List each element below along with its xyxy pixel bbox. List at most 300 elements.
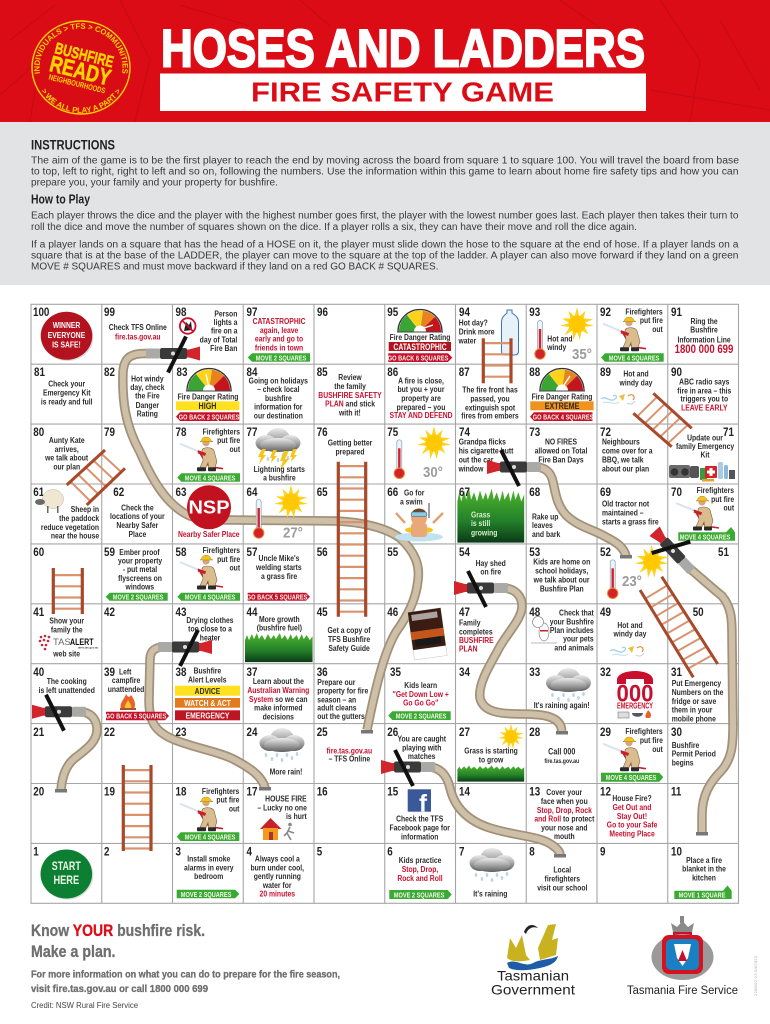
square 67: growing bbox=[471, 528, 498, 538]
square 13: 13 bbox=[529, 786, 540, 799]
square 66: Go for bbox=[404, 488, 424, 498]
square 82: the Fire bbox=[135, 391, 160, 401]
square 3: 3 bbox=[176, 846, 181, 859]
square 10: kitchen bbox=[692, 873, 716, 883]
badge: bushfire ready neighbourhoods bbox=[31, 20, 131, 115]
square 3: Install smoke bbox=[187, 854, 231, 864]
square 48: your Bushfire bbox=[550, 617, 594, 627]
square 73: Fire Ban Days bbox=[538, 455, 584, 465]
square 29 bbox=[600, 726, 663, 782]
square 91: Bushfire bbox=[690, 325, 718, 335]
square 1: 1 bbox=[33, 846, 39, 859]
move 2 squares: MOVE 2 SQUARES bbox=[181, 891, 232, 899]
square 85: Review bbox=[338, 372, 362, 382]
logo: tasmanian government: Government bbox=[491, 982, 575, 998]
square 30 bbox=[671, 726, 716, 768]
square 30: Bushfire bbox=[672, 740, 700, 750]
square 36: property for fire bbox=[317, 686, 369, 696]
square 18: put fire bbox=[216, 795, 240, 805]
square 84 bbox=[247, 366, 308, 421]
square 69: maintained – bbox=[602, 508, 644, 518]
square 68: Rake up bbox=[532, 512, 559, 522]
square 85: with it! bbox=[338, 408, 361, 418]
square 54: Hay shed bbox=[476, 558, 506, 568]
square 46 bbox=[387, 606, 447, 660]
square 49: 49 bbox=[600, 606, 611, 619]
square 97: again, leave bbox=[260, 325, 299, 335]
square 53: Kids are home on bbox=[533, 557, 590, 567]
square 98: Fire Ban bbox=[210, 343, 238, 353]
icon: emergency 000: 000 bbox=[616, 680, 654, 708]
hoses bbox=[55, 353, 733, 858]
text block: how to play: Each player throws the dice and the player with the highest number goes first, the player with the lowest number goes last. Each player then takes their turn to bbox=[31, 210, 739, 222]
alert: watch and act: WATCH & ACT bbox=[184, 698, 231, 708]
square 12: Get Out and bbox=[613, 802, 652, 812]
square 98: day of Total bbox=[200, 335, 237, 345]
start badge bbox=[41, 850, 93, 900]
logo: tas alert: TAS bbox=[53, 637, 71, 648]
icon: rain cloud bbox=[470, 848, 514, 882]
square 62: locations of your bbox=[110, 511, 165, 521]
icon: firefighter bbox=[180, 797, 223, 831]
square 82: Rating bbox=[137, 409, 158, 419]
text block: how to play: square that is at the base of the LADDER, the player can move to the square at the top of the ladder. A player can also move forward if they land on a green bbox=[31, 250, 738, 262]
winner badge bbox=[41, 312, 93, 361]
square 90: LEAVE EARLY bbox=[681, 403, 728, 413]
square 49 bbox=[600, 606, 647, 656]
square 89: windy day bbox=[619, 378, 653, 388]
logo: tasmanian government bbox=[491, 924, 575, 998]
square 15: information bbox=[401, 832, 439, 842]
text block: how to play: MOVE # SQUARES and must move backward if they land on a red GO BACK # SQUARES. bbox=[31, 262, 438, 272]
square 43: too close to a bbox=[188, 624, 233, 634]
square 59: flyscreens on bbox=[118, 573, 162, 583]
icon: no fire bbox=[180, 318, 196, 334]
square 25: – TFS Online bbox=[329, 754, 371, 764]
icon: fire danger gauge bbox=[397, 310, 443, 338]
square 59: windows bbox=[125, 582, 154, 592]
square 44: (bushfire fuel) bbox=[257, 623, 302, 633]
square 77: a bushfire bbox=[263, 473, 296, 483]
square 94: Hot day? bbox=[459, 318, 488, 328]
square 51: 51 bbox=[718, 546, 729, 559]
square 44: More growth bbox=[259, 614, 300, 624]
icon: firefighter bbox=[676, 496, 719, 530]
square 25 bbox=[317, 726, 372, 764]
square 72 bbox=[600, 426, 653, 474]
square 30: 30 bbox=[671, 726, 682, 739]
square 80: we talk about bbox=[44, 453, 89, 463]
square 36: Prepare our bbox=[317, 677, 355, 687]
square 30: begins bbox=[672, 758, 694, 768]
square 61: Sheep in bbox=[71, 504, 99, 514]
square 92: out bbox=[652, 324, 663, 334]
square 87: extinguish spot bbox=[465, 403, 516, 413]
text block: aim of the game: to top, left to right, right to left and so on, following the numbers. Use the information within this game to learn about home fire safety tips and how you can bbox=[31, 166, 738, 178]
square 43: Drying clothes bbox=[186, 615, 234, 625]
icon: sun bbox=[274, 485, 308, 518]
square 84: bushfire bbox=[265, 393, 292, 403]
image: grass bbox=[457, 766, 524, 782]
square 52 bbox=[600, 545, 669, 598]
rating: high: HIGH bbox=[199, 401, 217, 411]
square 71: Update our bbox=[687, 433, 723, 443]
square 86: property are bbox=[401, 393, 442, 403]
square 5: 5 bbox=[317, 846, 322, 859]
icon: sun bbox=[560, 307, 594, 340]
square 25: fire.tas.gov.au bbox=[327, 746, 372, 756]
square 8 bbox=[529, 846, 587, 893]
square 12 bbox=[600, 786, 658, 839]
square 78 bbox=[176, 426, 241, 483]
square 89: 89 bbox=[600, 366, 611, 379]
square 66 bbox=[387, 486, 443, 542]
square 78: put fire bbox=[217, 435, 241, 445]
badge: bushfire ready neighbourhoods: INDIVIDUALS > TFS > COMMUNITIES bbox=[34, 23, 128, 74]
square 96: 96 bbox=[317, 306, 328, 319]
square 42: 42 bbox=[104, 606, 115, 619]
square 93: Hot and bbox=[547, 334, 573, 344]
square 28 bbox=[529, 726, 580, 765]
icon: firefighter bbox=[180, 555, 223, 590]
square 83 bbox=[176, 366, 240, 422]
footer message: Make a plan. bbox=[31, 943, 116, 961]
square 60: 60 bbox=[33, 546, 44, 559]
square 77 bbox=[247, 426, 305, 483]
square 86: prepared – you bbox=[397, 402, 446, 412]
footer message: visit fire.tas.gov.au or call 1800 000 699 bbox=[31, 984, 208, 995]
square 4 bbox=[247, 846, 304, 899]
square 47: PLAN bbox=[459, 644, 478, 654]
icon: sun bbox=[417, 426, 451, 459]
square 4: water for bbox=[262, 880, 292, 890]
square 33: 33 bbox=[529, 666, 540, 679]
hose nozzle: square 70 bbox=[642, 518, 705, 582]
logo: tas alert: alert.tas.gov.au bbox=[78, 646, 99, 650]
icon: emergency kit bbox=[669, 462, 735, 482]
square 28: 28 bbox=[529, 726, 540, 739]
move 4 squares: MOVE 4 SQUARES bbox=[606, 774, 657, 782]
hose nozzle: square 40 bbox=[32, 695, 86, 731]
square 39: campfire bbox=[112, 675, 141, 685]
square 85: the family bbox=[334, 381, 367, 391]
square 86: but you + your bbox=[398, 384, 444, 394]
footer message: For more information on what you can do to prepare for the fire season, bbox=[31, 970, 340, 981]
square 68: and bark bbox=[532, 529, 561, 539]
square 26: 26 bbox=[387, 726, 398, 739]
square 40: 40 bbox=[33, 666, 44, 679]
subtitle box: FIRE SAFETY GAME bbox=[251, 77, 554, 108]
square 36 bbox=[317, 666, 369, 721]
square 12: Stay Out! bbox=[617, 811, 647, 821]
icon: water bottle bbox=[502, 310, 518, 355]
icon: wind bbox=[601, 394, 635, 404]
square 36: season – an bbox=[317, 695, 356, 705]
square 87: 87 bbox=[459, 366, 470, 379]
square 58 bbox=[176, 545, 241, 602]
square 18: 18 bbox=[176, 786, 186, 799]
square 8: firefighters bbox=[545, 874, 580, 884]
square 3 bbox=[176, 846, 239, 899]
square 56: 56 bbox=[317, 546, 328, 559]
square 8: 8 bbox=[529, 846, 535, 859]
square 33: It's raining again! bbox=[534, 700, 590, 710]
square 87: The fire front has bbox=[462, 385, 518, 395]
move 4 squares: MOVE 4 SQUARES bbox=[609, 355, 660, 363]
go back 5 squares: GO BACK 5 SQUARES bbox=[106, 713, 167, 721]
ladder: square 31 to 52 bbox=[640, 577, 718, 677]
icon: emergency 000: EMERGENCY bbox=[617, 700, 653, 710]
square 99: fire.tas.gov.au bbox=[115, 332, 161, 342]
square 86 bbox=[387, 366, 453, 420]
square 41: Show your bbox=[49, 616, 84, 626]
icon: firefighter bbox=[603, 317, 646, 351]
square 58: 58 bbox=[176, 546, 186, 559]
square 90 bbox=[671, 366, 731, 413]
credit: Credit: NSW Rural Fire Service bbox=[31, 1001, 139, 1010]
square 41 bbox=[33, 606, 99, 659]
heading: instructions: INSTRUCTIONS bbox=[31, 138, 115, 152]
square 93: 35° bbox=[572, 345, 592, 362]
square 67: Grass bbox=[471, 510, 490, 520]
square 61: 61 bbox=[33, 486, 44, 499]
move 4 squares: MOVE 4 SQUARES bbox=[185, 834, 236, 842]
NSP badge: NSP bbox=[188, 498, 230, 518]
square 26 bbox=[387, 726, 446, 761]
square 13: Cover your bbox=[546, 787, 582, 797]
alert: advice: ADVICE bbox=[195, 686, 220, 696]
square 71: Kit bbox=[701, 450, 710, 460]
square 92: 92 bbox=[600, 306, 611, 319]
square 75: 30° bbox=[423, 463, 443, 480]
square 64: 27° bbox=[283, 524, 303, 541]
square 1 bbox=[33, 846, 93, 900]
square 37: make informed bbox=[254, 703, 303, 713]
text block: how to play: roll the dice and move the number of squares shown on the dice. If a player rolls a six, they can have their move and roll the dice again. bbox=[31, 222, 637, 233]
square 80: our plan bbox=[53, 462, 80, 472]
square 3: bedroom bbox=[194, 871, 223, 881]
icon: rain cloud bbox=[260, 728, 304, 762]
icon: thermometer bbox=[535, 320, 545, 359]
square 18: Firefighters bbox=[202, 786, 239, 796]
square 17: is hurt bbox=[286, 811, 307, 821]
text block: aim of the game bbox=[31, 156, 739, 188]
header banner bbox=[0, 0, 770, 122]
square 53: we talk about our bbox=[533, 575, 590, 585]
square 36: out the gutters bbox=[317, 711, 365, 721]
square 39: unattended bbox=[108, 684, 145, 694]
square 49: windy day bbox=[613, 629, 647, 639]
square 59: your property bbox=[118, 556, 163, 566]
square 71: family Emergency bbox=[676, 441, 735, 451]
square 64 bbox=[247, 485, 308, 541]
square 4: burn under cool, bbox=[251, 863, 304, 873]
square 37: 37 bbox=[247, 666, 257, 679]
square 47: BUSHFIRE bbox=[459, 635, 494, 645]
square 97: early and go to bbox=[255, 334, 303, 344]
square 66: 66 bbox=[387, 486, 398, 499]
square 47: completes bbox=[459, 627, 493, 637]
square 64: 64 bbox=[247, 486, 258, 499]
square 65: 65 bbox=[317, 486, 328, 499]
square 71: 71 bbox=[723, 426, 734, 439]
square 29: 29 bbox=[600, 726, 611, 739]
square 90: 90 bbox=[671, 366, 682, 379]
square 58: out bbox=[230, 563, 240, 573]
square 74: Grandpa flicks bbox=[459, 437, 506, 447]
square 70: 70 bbox=[671, 486, 682, 499]
square 44 bbox=[245, 606, 313, 662]
square 69: starts a grass fire bbox=[602, 517, 659, 527]
square 19: 19 bbox=[104, 786, 115, 799]
badge: bushfire ready neighbourhoods: READY bbox=[47, 50, 114, 91]
logo: tas alert bbox=[39, 635, 99, 650]
square 26: playing with bbox=[402, 743, 442, 753]
square 10 bbox=[671, 846, 732, 900]
move 4 squares: MOVE 4 SQUARES bbox=[680, 534, 731, 542]
square 6: Rock and Roll bbox=[397, 873, 443, 883]
square 9: 9 bbox=[600, 846, 605, 859]
square 76 bbox=[317, 426, 372, 457]
square 78: out bbox=[230, 444, 240, 454]
square 48: 48 bbox=[529, 606, 540, 619]
footer message: Know YOUR bushfire risk. bbox=[31, 922, 205, 940]
square 76: Getting better bbox=[328, 438, 372, 448]
square 80 bbox=[33, 426, 89, 472]
icon: fire danger gauge bbox=[186, 368, 232, 396]
square 54: on fire bbox=[480, 567, 502, 577]
go back 6 squares: GO BACK 6 SQUARES bbox=[388, 355, 449, 363]
square 39: Left bbox=[119, 667, 132, 677]
square 66: a swim bbox=[400, 497, 423, 507]
square 31: fridge or save bbox=[672, 696, 717, 706]
ladder: square 2 to 19 bbox=[123, 765, 151, 851]
icon: facebook: f bbox=[419, 790, 428, 818]
square 4: 20 minutes bbox=[260, 889, 295, 899]
square 57: a grass fire bbox=[261, 571, 298, 581]
square 75 bbox=[387, 426, 451, 480]
square 48 bbox=[529, 606, 594, 653]
ladder: square 41 to 60 bbox=[53, 568, 82, 614]
logo: tasmanian government: Tasmanian bbox=[497, 968, 569, 984]
square 62: Nearby Safer bbox=[116, 520, 158, 530]
square 91: 1800 000 699 bbox=[675, 343, 733, 356]
print code: 2208/02 V3 04/2023 bbox=[753, 955, 758, 996]
square 13: Stop, Drop, Rock bbox=[537, 805, 593, 815]
square 89: Hot and bbox=[623, 369, 649, 379]
square 73: allowed on Total bbox=[535, 446, 587, 456]
square 49: Hot and bbox=[617, 620, 643, 630]
square 47: 47 bbox=[459, 606, 470, 619]
square 59: 59 bbox=[104, 546, 115, 559]
square 93: 93 bbox=[529, 306, 540, 319]
square 87: fires from embers bbox=[461, 411, 519, 421]
square 62: 62 bbox=[113, 486, 124, 499]
go back 2 squares: GO BACK 2 SQUARES bbox=[179, 414, 240, 422]
square 18 bbox=[176, 786, 240, 842]
square 86: 86 bbox=[387, 366, 398, 379]
square 13 bbox=[529, 786, 595, 841]
square 7 bbox=[459, 846, 514, 899]
square 10: Place a fire bbox=[686, 855, 723, 865]
square 100: 100 bbox=[33, 306, 49, 319]
square 47 bbox=[459, 606, 494, 654]
square 61: near the house bbox=[51, 531, 100, 541]
square 8: Local bbox=[553, 865, 571, 875]
icon: fire danger gauge bbox=[539, 368, 585, 396]
square 24: 24 bbox=[247, 726, 258, 739]
start badge: START bbox=[52, 861, 81, 873]
square 12: Meeting Place bbox=[609, 829, 655, 839]
square 97 bbox=[247, 306, 310, 363]
square 27: Grass is starting bbox=[464, 746, 518, 756]
badge: bushfire ready neighbourhoods: BUSHFIRE bbox=[53, 40, 115, 71]
image: bushfire safety guide book bbox=[408, 608, 447, 660]
square 24: More rain! bbox=[270, 767, 302, 777]
image: grass bbox=[245, 633, 313, 662]
square 62: Place bbox=[129, 529, 147, 539]
square 17: HOUSE FIRE bbox=[265, 794, 307, 804]
square 54: 54 bbox=[459, 546, 471, 559]
square 43 bbox=[176, 606, 234, 643]
footer message bbox=[31, 922, 340, 995]
square 84: 84 bbox=[247, 366, 258, 379]
square 31: 31 bbox=[671, 666, 682, 679]
square 94: Drink more bbox=[459, 327, 495, 337]
square 99: Check TFS Online bbox=[109, 322, 167, 332]
rating: extreme: EXTREME bbox=[545, 401, 580, 411]
winner badge: IS SAFE! bbox=[52, 340, 81, 350]
square 91: Ring the bbox=[690, 316, 718, 326]
square 82: day, check bbox=[130, 382, 165, 392]
square 39 bbox=[104, 666, 169, 721]
square 74 bbox=[458, 426, 514, 474]
square 40: is left unattended bbox=[39, 685, 95, 695]
ladder: square 71 to 89 bbox=[633, 393, 692, 447]
square 57 bbox=[247, 546, 310, 602]
square 18: out bbox=[229, 804, 240, 814]
square 41: 41 bbox=[33, 606, 44, 619]
icon: sheep bbox=[35, 490, 64, 513]
icon: wind bbox=[610, 646, 644, 656]
icon: sun bbox=[498, 724, 524, 749]
square 35: 35 bbox=[390, 666, 401, 679]
square 27 bbox=[457, 724, 524, 782]
square 52: 52 bbox=[600, 546, 611, 559]
square 80: arrives, bbox=[55, 444, 79, 454]
square 73 bbox=[529, 426, 587, 465]
square 99: 99 bbox=[104, 306, 115, 319]
square 72: Neighbours bbox=[602, 437, 640, 447]
winner badge: WINNER bbox=[53, 320, 81, 330]
icon: thermometer bbox=[608, 560, 618, 598]
square 12: House Fire? bbox=[612, 793, 652, 803]
icon: emergency 000 bbox=[616, 671, 654, 718]
square 17: – Lucky no one bbox=[257, 803, 307, 813]
square 35: "Get Down Low + bbox=[393, 689, 449, 699]
square 76: prepared bbox=[335, 447, 365, 457]
icon: sun bbox=[635, 545, 669, 578]
square 8: visit our school bbox=[537, 883, 587, 893]
square 81: Check your bbox=[48, 379, 85, 389]
square 97: 97 bbox=[247, 306, 257, 319]
square 85: PLAN and stick bbox=[325, 399, 376, 409]
square 78: 78 bbox=[176, 426, 186, 439]
square 52: 23° bbox=[622, 572, 642, 589]
move 4 squares: MOVE 4 SQUARES bbox=[185, 475, 236, 483]
square 29: put fire bbox=[640, 735, 663, 745]
square 6: Kids practice bbox=[399, 855, 442, 865]
